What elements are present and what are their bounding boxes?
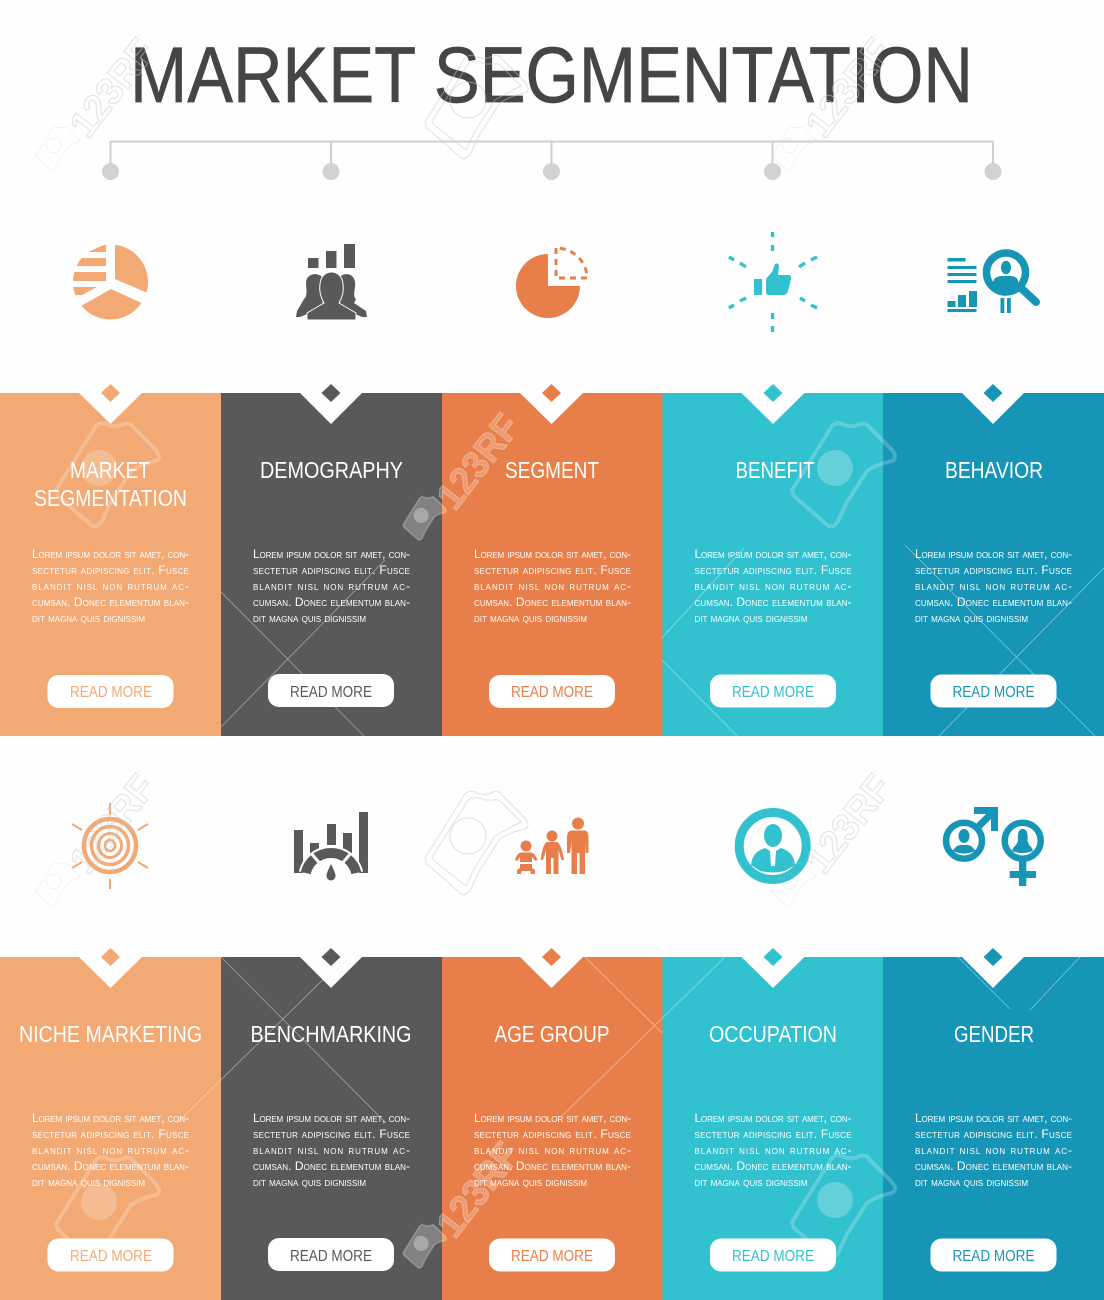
panel: gender: cumsan. Donec elementum blan- <box>915 1159 1072 1173</box>
icon: report and magnifier over person <box>948 253 1036 313</box>
panel: benefit: BENEFIT <box>736 457 814 483</box>
panel: demography: dit magna quis dignissim <box>253 611 366 625</box>
panel: age group: cumsan. Donec elementum blan- <box>474 1159 631 1173</box>
panel: niche marketing <box>0 948 221 1300</box>
panel: age group: sectetur adipiscing elit. Fusce <box>474 1127 631 1141</box>
panel: benefit: sectetur adipiscing elit. Fusce <box>694 563 852 577</box>
panel: market segmentation: sectetur adipiscing elit. Fusce <box>32 563 189 577</box>
panel: niche marketing: cumsan. Donec elementum blan- <box>32 1159 189 1173</box>
panel: benefit <box>662 384 884 736</box>
panel: occupation: sectetur adipiscing elit. Fusce <box>694 1127 852 1141</box>
icon: family of three ages <box>515 818 588 874</box>
panel: benchmarking: Lorem ipsum dolor sit amet, con- <box>253 1111 410 1125</box>
panel: segment: cumsan. Donec elementum blan- <box>474 595 631 609</box>
panel: gender: READ MORE <box>952 1248 1034 1265</box>
panel: benchmarking: READ MORE <box>290 1248 372 1265</box>
icon: striped pie chart <box>70 244 148 319</box>
icon: people group with bars <box>296 244 367 320</box>
panel: demography: blandit nisl non rutrum ac- <box>253 579 410 593</box>
panel: behavior: READ MORE <box>952 684 1034 701</box>
panel: niche marketing: Lorem ipsum dolor sit amet, con- <box>32 1111 189 1125</box>
panel: niche marketing: sectetur adipiscing elit. Fusce <box>32 1127 189 1141</box>
panel: benchmarking: dit magna quis dignissim <box>253 1175 366 1189</box>
panel: market segmentation: READ MORE <box>70 684 152 701</box>
panel: age group: Lorem ipsum dolor sit amet, con- <box>474 1111 631 1125</box>
panel: gender: GENDER <box>954 1021 1034 1047</box>
panel: occupation: Lorem ipsum dolor sit amet, con- <box>694 1111 852 1125</box>
panel: behavior: BEHAVIOR <box>945 457 1043 483</box>
panel: occupation: blandit nisl non rutrum ac- <box>694 1143 852 1157</box>
panel: age group <box>442 948 662 1300</box>
panel: occupation: OCCUPATION <box>709 1021 837 1047</box>
watermark overlay: 123RF stamps on white background: 123RF <box>62 767 164 882</box>
watermark overlay: 123RF stamps on white background: 123RF <box>798 767 900 882</box>
panel: segment: dit magna quis dignissim <box>474 611 587 625</box>
panel: benchmarking: sectetur adipiscing elit. Fusce <box>253 1127 410 1141</box>
panel: market segmentation: cumsan. Donec elementum blan- <box>32 595 189 609</box>
panel: market segmentation: blandit nisl non rutrum ac- <box>32 579 189 593</box>
panel: market segmentation: Lorem ipsum dolor sit amet, con- <box>32 547 189 561</box>
panel: occupation: READ MORE <box>732 1248 814 1265</box>
panel: segment: READ MORE <box>511 684 593 701</box>
panel: market segmentation: dit magna quis dignissim <box>32 611 145 625</box>
panel: segment: Lorem ipsum dolor sit amet, con- <box>474 547 631 561</box>
panel: segment: SEGMENT <box>505 457 599 483</box>
panel: behavior: blandit nisl non rutrum ac- <box>915 579 1072 593</box>
watermark overlay: 123RF stamps on coloured panels <box>56 407 895 1268</box>
panel: demography: Lorem ipsum dolor sit amet, con- <box>253 547 410 561</box>
panel: benefit: READ MORE <box>732 684 814 701</box>
panel: benefit: Lorem ipsum dolor sit amet, con- <box>694 547 852 561</box>
panel: age group: dit magna quis dignissim <box>474 1175 587 1189</box>
watermark overlay: 123RF stamps on white background: 123RF <box>798 31 900 146</box>
panel: occupation: cumsan. Donec elementum blan- <box>694 1159 852 1173</box>
panel: segment <box>442 384 662 736</box>
panel: niche marketing: dit magna quis dignissim <box>32 1175 145 1189</box>
icon: employee in circle <box>739 812 806 880</box>
panel: demography <box>221 384 442 736</box>
panel: niche marketing: blandit nisl non rutrum ac- <box>32 1143 189 1157</box>
panel: benefit: blandit nisl non rutrum ac- <box>694 579 852 593</box>
panel: benchmarking: blandit nisl non rutrum ac- <box>253 1143 410 1157</box>
panel: benchmarking <box>221 948 442 1300</box>
panel: segment: blandit nisl non rutrum ac- <box>474 579 631 593</box>
panel: demography: DEMOGRAPHY <box>260 457 403 483</box>
panel: niche marketing: READ MORE <box>70 1248 152 1265</box>
watermark overlay: thin diagonal lines <box>177 545 1104 1123</box>
connector tree with five nodes <box>102 141 1002 180</box>
panel: age group: blandit nisl non rutrum ac- <box>474 1143 631 1157</box>
panel: occupation <box>662 948 884 1300</box>
panel: behavior: Lorem ipsum dolor sit amet, con- <box>915 547 1072 561</box>
panel: demography: sectetur adipiscing elit. Fusce <box>253 563 410 577</box>
icon: target with rays <box>72 803 148 889</box>
panel: market segmentation: SEGMENTATION <box>34 485 187 511</box>
panel: gender: sectetur adipiscing elit. Fusce <box>915 1127 1072 1141</box>
panel: benefit: cumsan. Donec elementum blan- <box>694 595 852 609</box>
panel: market segmentation <box>0 384 221 736</box>
watermark overlay: 123RF stamps on coloured panels: 123RF <box>429 407 529 518</box>
panel: demography: READ MORE <box>290 684 372 701</box>
icon: benchmark gauge with bars <box>294 812 368 880</box>
panel: benchmarking: BENCHMARKING <box>250 1021 412 1047</box>
panel: behavior: dit magna quis dignissim <box>915 611 1028 625</box>
panel: behavior: sectetur adipiscing elit. Fusce <box>915 563 1072 577</box>
watermark overlay: 123RF stamps on white background <box>36 31 900 906</box>
title: MARKET SEGMENTATION <box>130 30 973 119</box>
panel: gender <box>883 948 1104 1300</box>
panel: demography: cumsan. Donec elementum blan- <box>253 595 410 609</box>
panel: behavior <box>883 384 1104 736</box>
panel: gender: dit magna quis dignissim <box>915 1175 1028 1189</box>
icon: male and female symbols <box>946 807 1041 886</box>
watermark overlay: 123RF stamps on white background: 123RF <box>62 31 164 146</box>
panel: gender: Lorem ipsum dolor sit amet, con- <box>915 1111 1072 1125</box>
panel: gender: blandit nisl non rutrum ac- <box>915 1143 1072 1157</box>
panel: age group: AGE GROUP <box>494 1021 610 1047</box>
panel: segment: sectetur adipiscing elit. Fusce <box>474 563 631 577</box>
panel: niche marketing: NICHE MARKETING <box>19 1021 202 1047</box>
panel: market segmentation: MARKET <box>70 457 150 483</box>
panel: benchmarking: cumsan. Donec elementum blan- <box>253 1159 410 1173</box>
panel: benefit: dit magna quis dignissim <box>694 611 808 625</box>
watermark overlay: 123RF stamps on coloured panels: 123RF <box>429 1135 529 1246</box>
panel: occupation: dit magna quis dignissim <box>694 1175 808 1189</box>
panel: age group: READ MORE <box>511 1248 593 1265</box>
icon: pie chart with dashed missing quarter <box>516 248 587 318</box>
icon: thumbs up with rays <box>729 232 817 332</box>
panel: behavior: cumsan. Donec elementum blan- <box>915 595 1072 609</box>
